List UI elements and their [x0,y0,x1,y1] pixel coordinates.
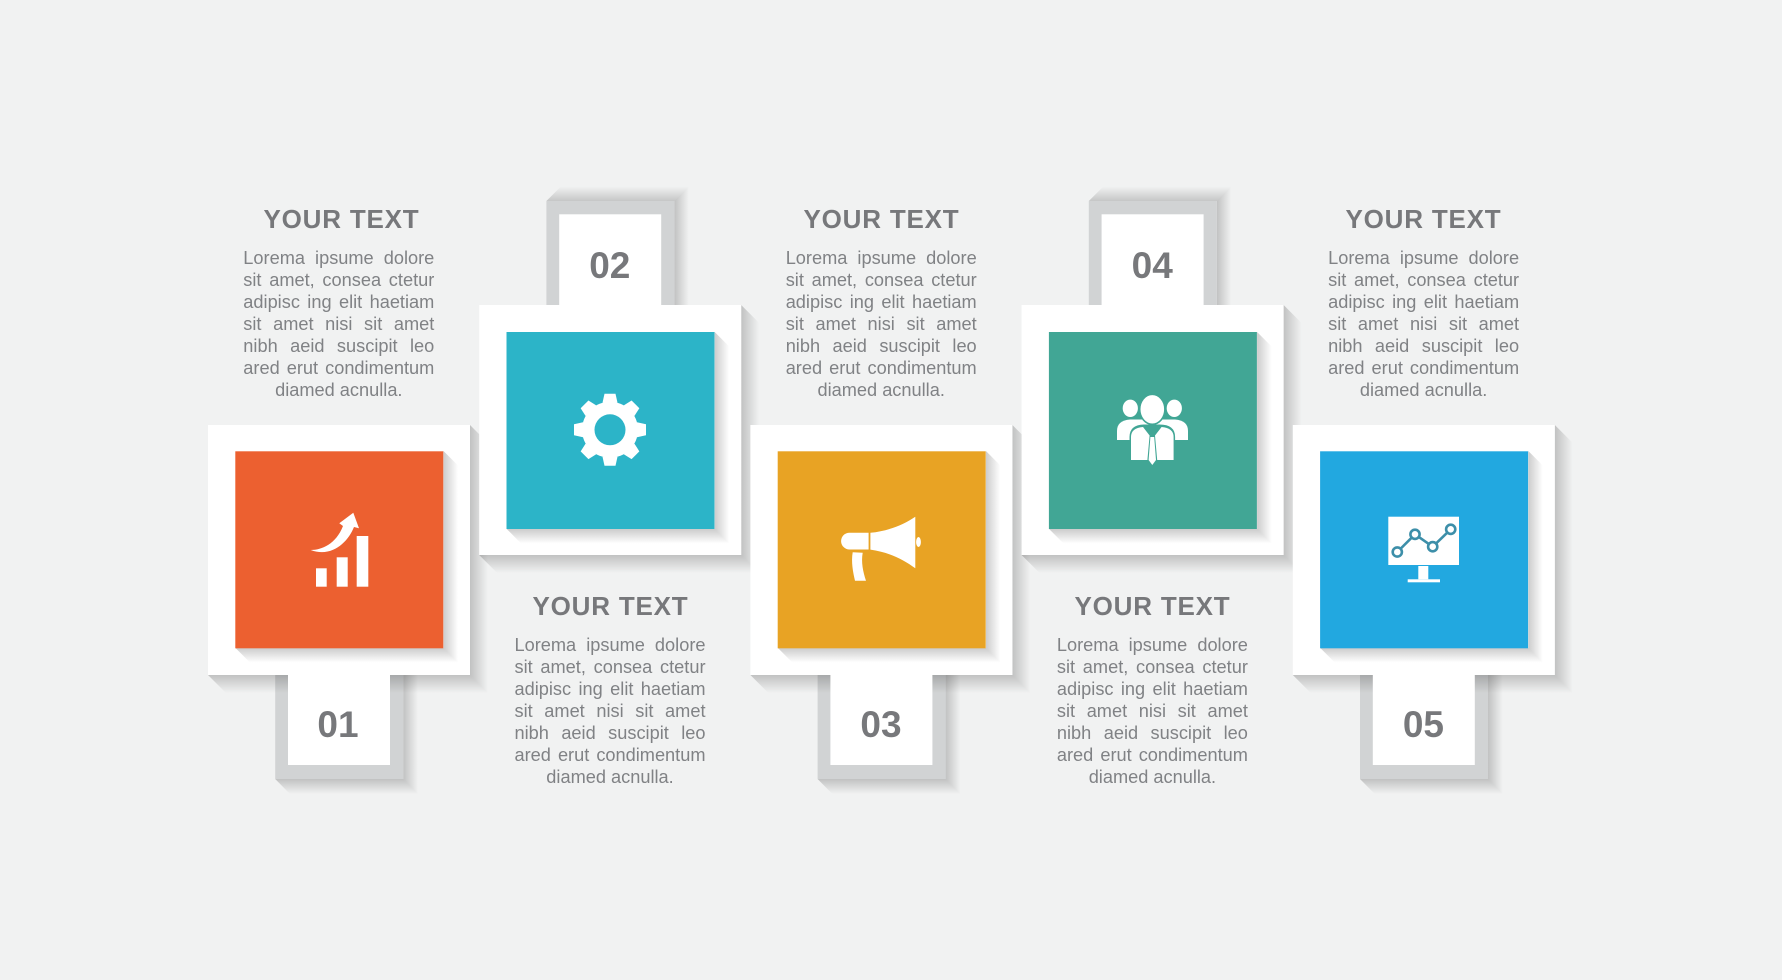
white card 3 [750,425,1030,693]
text block: step 4: diamed acnulla. [1089,766,1216,786]
text block: step 2 [514,634,706,786]
text block: step 5: nibh aeid suscipit leo [1328,336,1519,356]
text block: step 2: sit amet, consea ctetur [514,656,706,676]
icon: monitor with line chart [1388,517,1459,582]
heading: step 1: YOUR TEXT [264,204,420,234]
icon: gear [574,394,646,466]
heading: step 2: YOUR TEXT [532,590,688,620]
text block: step 5: Lorema ipsume dolore [1328,248,1519,268]
text block: step 1: nibh aeid suscipit leo [243,336,434,356]
teal square [506,332,729,544]
heading: step 5: YOUR TEXT [1346,204,1502,234]
amber square [778,451,1000,662]
text block: step 4 [1057,634,1248,786]
text block: step 5: ared erut condimentum [1328,358,1519,378]
text block: step 1: sit amet nisi sit amet [243,314,434,334]
text block: step 5: diamed acnulla. [1360,380,1487,400]
text block: step 3: Lorema ipsume dolore [786,248,977,268]
text block: step 2: adipisc ing elit haetiam [514,678,706,698]
text block: step 4: adipisc ing elit haetiam [1057,678,1248,698]
text block: step 2: Lorema ipsume dolore [514,634,706,654]
heading: step 4: YOUR TEXT [1074,590,1230,620]
text block: step 4: sit amet, consea ctetur [1057,656,1248,676]
number tab 02 [546,186,689,305]
text block: step 4: ared erut condimentum [1057,744,1248,764]
text block: step 5: sit amet, consea ctetur [1328,270,1519,290]
step 3 [750,425,1030,794]
text block: step 1 [243,248,434,400]
number tab 04: 04 [1132,245,1173,286]
step 2 [479,186,759,573]
text block: step 3: adipisc ing elit haetiam [786,292,977,312]
text block: step 1: sit amet, consea ctetur [243,270,434,290]
text block: step 1: Lorema ipsume dolore [243,248,434,268]
text block: step 1: diamed acnulla. [275,380,402,400]
step 5 [1293,425,1573,794]
number tab 04 [1089,186,1231,305]
number tab 05: 05 [1403,704,1444,745]
heading: step 3: YOUR TEXT [804,204,960,234]
text block: step 3: ared erut condimentum [786,358,977,378]
text block: step 1: adipisc ing elit haetiam [243,292,434,312]
text block: step 3: nibh aeid suscipit leo [786,336,977,356]
green square [1049,332,1272,544]
text block: step 4: Lorema ipsume dolore [1057,634,1248,654]
step 4 [1022,186,1302,573]
text block: step 5: sit amet nisi sit amet [1328,314,1519,334]
text block: step 4: nibh aeid suscipit leo [1057,722,1248,742]
blue square [1320,451,1543,662]
number tab 01: 01 [317,704,359,745]
number tab 01 [275,675,418,794]
number tab 05 [1360,675,1503,794]
number tab 02: 02 [589,245,630,286]
text block: step 2: diamed acnulla. [546,766,674,786]
white card 5 [1293,425,1573,693]
text block: step 3 [786,248,977,400]
number tab 03: 03 [860,704,902,745]
orange square [235,451,458,662]
white card 4 [1022,305,1302,573]
text block: step 1: ared erut condimentum [243,358,434,378]
white card 1 [208,425,488,693]
step 1 [208,425,488,794]
text block: step 2: sit amet nisi sit amet [514,700,706,720]
number tab 03 [818,675,960,794]
white card 2 [479,305,759,573]
icon: growth chart with arrow [311,513,368,587]
text block: step 5: adipisc ing elit haetiam [1328,292,1519,312]
text block: step 3: diamed acnulla. [817,380,945,400]
text block: step 3: sit amet nisi sit amet [786,314,977,334]
icon: megaphone [841,517,921,581]
text block: step 3: sit amet, consea ctetur [786,270,977,290]
text block: step 2: nibh aeid suscipit leo [514,722,706,742]
icon: team of people [1117,394,1188,465]
text block: step 4: sit amet nisi sit amet [1057,700,1248,720]
text block: step 5 [1328,248,1519,400]
text block: step 2: ared erut condimentum [514,744,706,764]
